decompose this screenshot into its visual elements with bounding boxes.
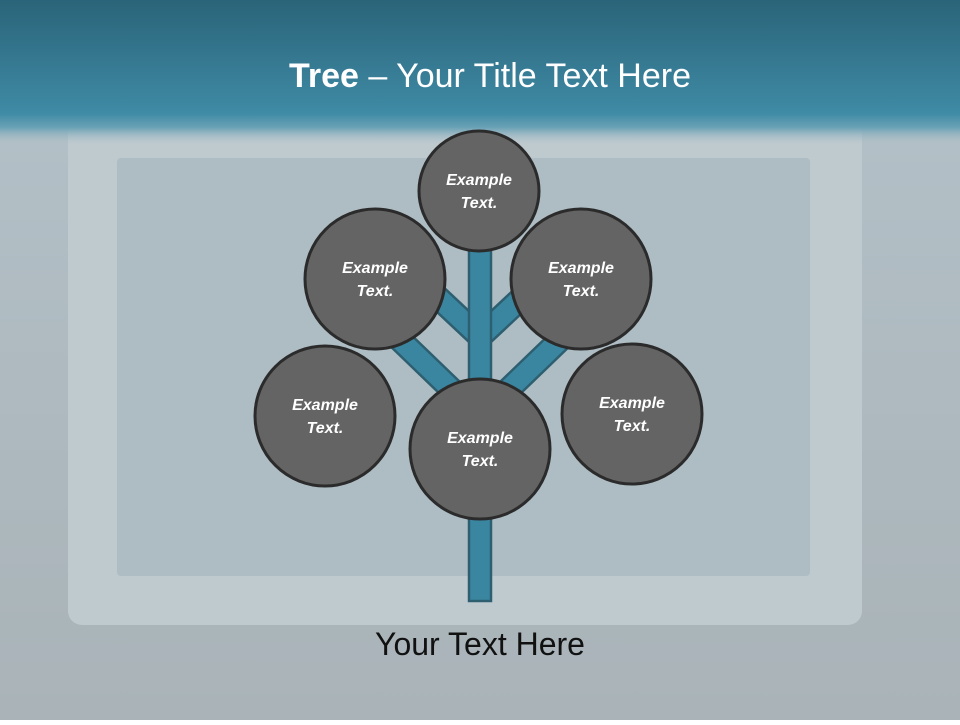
circle: upper right: Example: [548, 260, 614, 277]
caption: Your Text Here: [375, 626, 585, 662]
tablet device: [68, 120, 862, 625]
circle: lower right: Example: [599, 395, 665, 412]
circle: bottom center: [410, 379, 550, 519]
circle: top: [419, 131, 539, 251]
circle: upper right: [511, 209, 651, 349]
circle: lower left: [255, 346, 395, 486]
circle: bottom center: Text.: [462, 453, 498, 470]
circle: upper left: [305, 209, 445, 349]
tree circles: [255, 131, 702, 519]
circle: upper left: Example: [342, 260, 408, 277]
title: Tree – Your Title Text Here: [289, 57, 691, 95]
tree trunk and branches: [395, 240, 565, 601]
circle: lower left: Text.: [307, 420, 343, 437]
title banner: [0, 0, 960, 145]
circle: bottom center: Example: [447, 430, 513, 447]
circle: upper right: Text.: [563, 283, 599, 300]
circle: top: Example: [446, 172, 512, 189]
circle: lower left: Example: [292, 397, 358, 414]
circle: upper left: Text.: [357, 283, 393, 300]
circle: lower right: Text.: [614, 418, 650, 435]
circle: lower right: [562, 344, 702, 484]
circle: top: Text.: [461, 195, 497, 212]
